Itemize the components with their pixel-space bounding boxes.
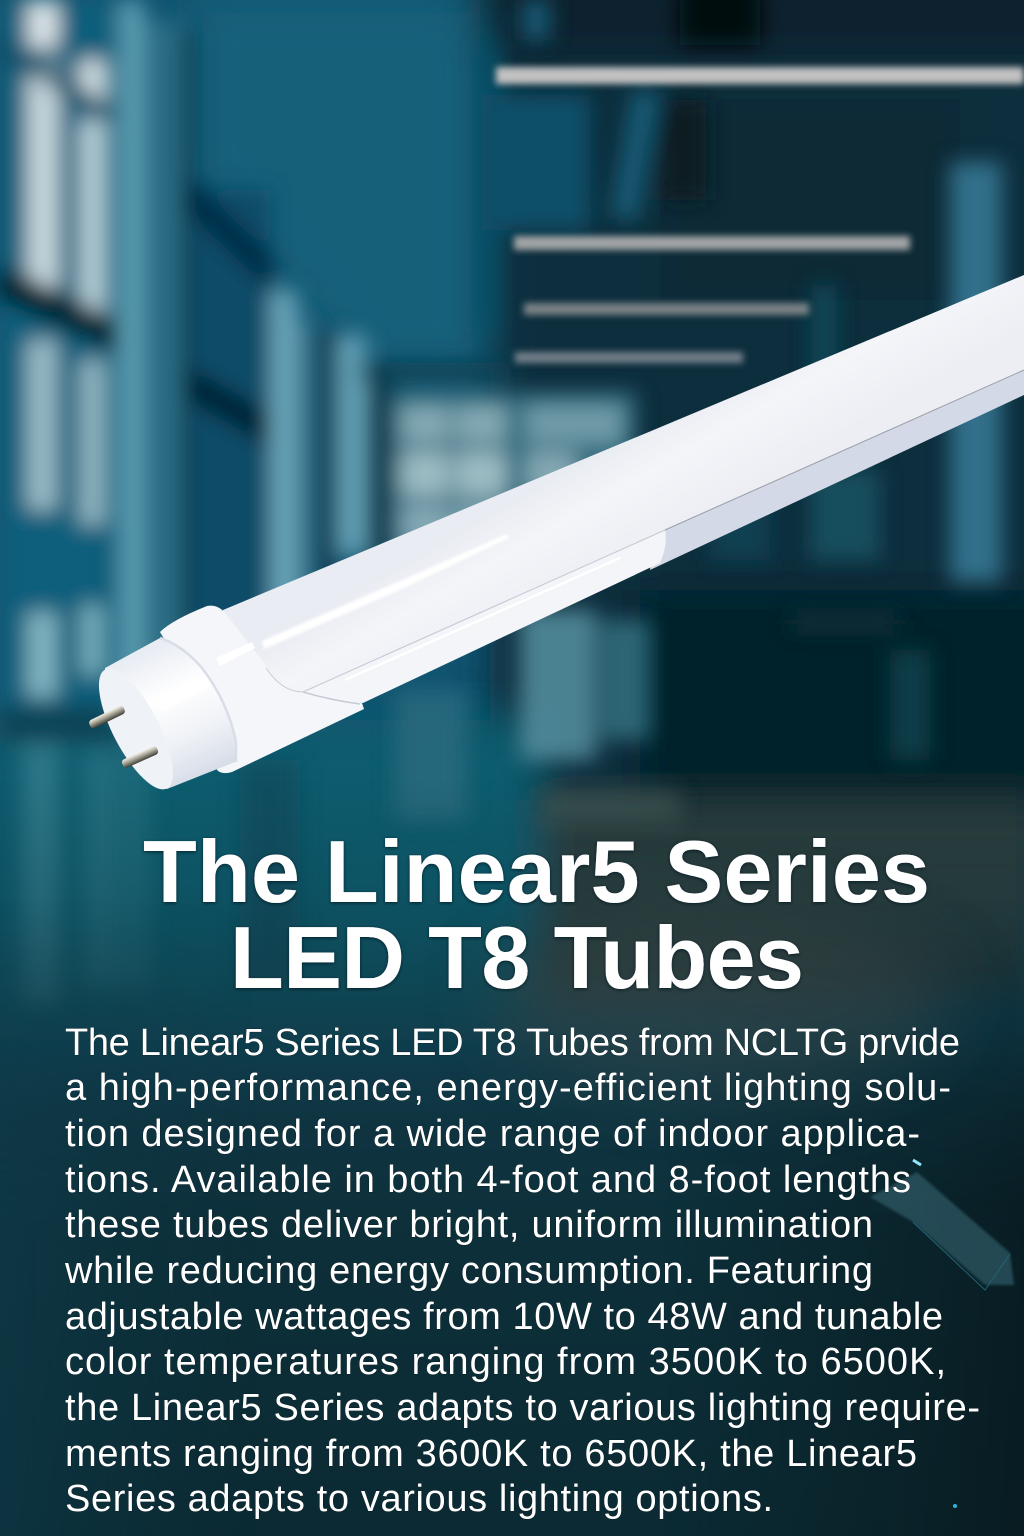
tube lower panel (303, 530, 666, 703)
end cap face (85, 659, 187, 799)
end collar with tail (160, 606, 364, 773)
title: The Linear5 Series (143, 822, 930, 921)
body paragraph: Series adapts to various lighting options. (65, 1478, 773, 1520)
back windows (396, 392, 636, 562)
title: LED T8 Tubes (230, 908, 804, 1007)
title (143, 822, 930, 1007)
pillar (118, 0, 144, 720)
right pillar and ceiling details (490, 95, 590, 230)
tube glossy highlight (262, 534, 509, 649)
contact pin lower (121, 745, 159, 769)
body paragraph: adjustable wattages from 10W to 48W and tunable (65, 1296, 943, 1338)
body paragraph: the Linear5 Series adapts to various lighting require- (65, 1387, 980, 1429)
body paragraph: these tubes deliver bright, uniform illumination (65, 1204, 873, 1246)
dark gradient panel behind the text (0, 780, 1024, 1536)
decorative crystal shape, lower right (870, 1160, 1014, 1508)
cap gloss highlight (158, 676, 210, 712)
body paragraph: a high-performance, energy-efficient lighting solu- (65, 1067, 951, 1109)
contact pin upper (88, 705, 126, 729)
left window panes (0, 0, 112, 720)
second window group (192, 190, 270, 630)
tube upper body (223, 275, 1024, 700)
body paragraph (64, 1022, 980, 1520)
body paragraph: The Linear5 Series LED T8 Tubes from NCLTG prvide (65, 1022, 960, 1064)
body paragraph: tions. Available in both 4-foot and 8-foot lengths (65, 1159, 911, 1201)
floor reflections (22, 745, 60, 1005)
body paragraph: tion designed for a wide range of indoor applica- (65, 1113, 920, 1155)
body paragraph: ments ranging from 3600K to 6500K, the Linear5 (65, 1433, 917, 1475)
body paragraph: while reducing energy consumption. Featuring (64, 1250, 873, 1292)
LED T8 tube product (85, 275, 1024, 799)
end cap barrel (105, 638, 235, 789)
body paragraph: color temperatures ranging from 3500K to 6500K, (65, 1341, 946, 1383)
diffuser strip (650, 370, 1024, 570)
